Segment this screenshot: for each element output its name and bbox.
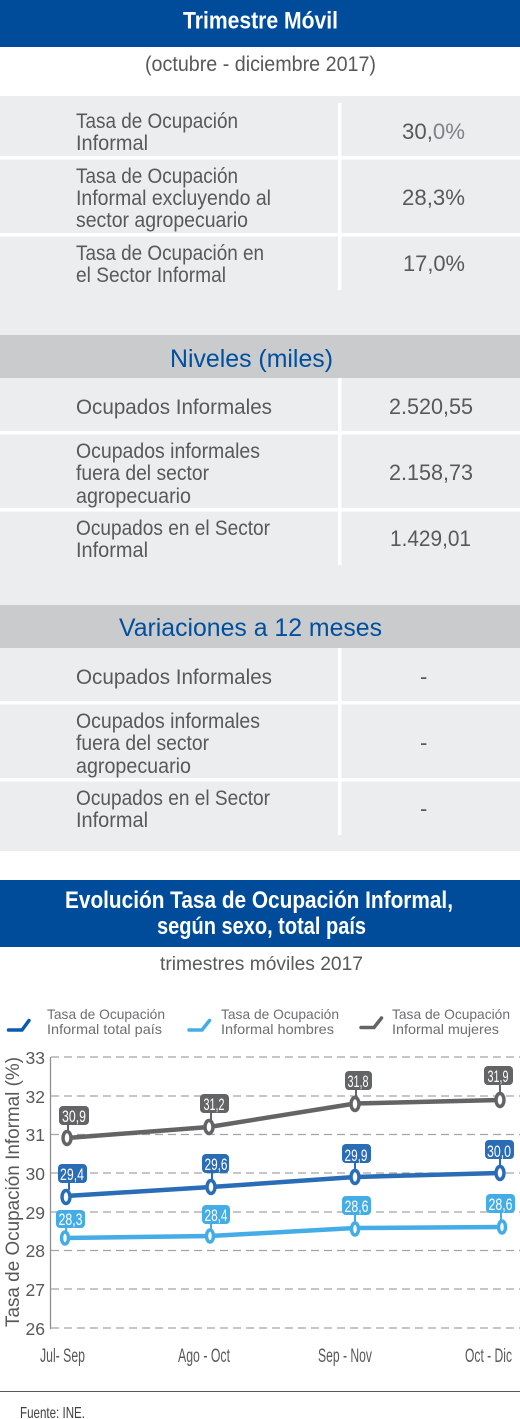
series: total país: 29,6: [204, 1155, 228, 1174]
row: excluyendo sector agropecuario: Tasa de Ocupación: [76, 164, 238, 188]
legend: total país: Tasa de Ocupación: [47, 1006, 165, 1022]
series: hombres: [56, 1194, 515, 1244]
series: mujeres: [59, 1066, 513, 1144]
panel: niveles: [0, 378, 520, 605]
row: fuera del sector agropecuario: 2.158,73: [389, 460, 473, 485]
subtitle: trimestres móviles: trimestres móviles 2017: [160, 954, 363, 975]
legend: mujeres: Tasa de Ocupación: [392, 1006, 510, 1022]
row: sector informal: Tasa de Ocupación en: [76, 241, 264, 265]
y axis labels: 29: [26, 1203, 45, 1223]
x axis labels: Sep - Nov: [318, 1346, 372, 1367]
subtitle: period: (octubre - diciembre 2017): [145, 52, 376, 76]
row: ocupados informales: Ocupados Informales: [76, 665, 272, 689]
row: ocupados en el sector informal: 1.429,01: [390, 526, 471, 551]
row: tasa de ocupación informal: [76, 109, 465, 155]
legend: mujeres: Informal mujeres: [392, 1021, 499, 1037]
y axis labels: 31: [26, 1125, 45, 1145]
row: ocupados informales: [76, 664, 427, 689]
row: sector informal: el Sector Informal: [76, 263, 226, 287]
row: fuera del sector agropecuario: agropecuario: [76, 754, 191, 778]
y axis labels: 32: [26, 1087, 45, 1107]
y axis labels: [26, 1048, 45, 1339]
legend: total país: [8, 1006, 165, 1037]
row: ocupados en el sector informal: Informal: [76, 808, 148, 832]
legend: [8, 1006, 510, 1037]
x axis labels: Ago - Oct: [178, 1346, 230, 1367]
series: hombres: 28,4: [204, 1206, 228, 1225]
panel: trimestre móvil rates: [0, 96, 520, 335]
panel: variaciones: [0, 648, 520, 851]
heading: Niveles (miles): Niveles (miles): [170, 345, 333, 373]
series: mujeres: 31,8: [348, 1072, 368, 1091]
y axis labels: 28: [26, 1241, 45, 1261]
row: fuera del sector agropecuario: Ocupados informales: [76, 439, 260, 463]
row: fuera del sector agropecuario: Ocupados informales: [76, 709, 260, 733]
row: excluyendo sector agropecuario: sector agropecuario: [76, 208, 248, 232]
row: tasa de ocupación informal: Tasa de Ocupación: [76, 109, 238, 133]
heading: Variaciones a 12 meses: Variaciones a 12 meses: [119, 614, 382, 642]
series: hombres: 28,6: [344, 1197, 368, 1216]
row: ocupados en el sector informal: [76, 786, 427, 832]
header: Evolución Tasa de Ocupación Informal: según sexo, total país: [157, 913, 366, 940]
series: total país: 29,4: [60, 1165, 84, 1184]
series: mujeres: 30,9: [62, 1107, 86, 1126]
row: fuera del sector agropecuario: [76, 709, 427, 778]
header: Evolución Tasa de Ocupación Informal: [0, 880, 520, 947]
heading: Variaciones a 12 meses: [0, 605, 520, 648]
row: ocupados informales: [76, 394, 473, 419]
row: ocupados en el sector informal: Ocupados en el Sector: [76, 786, 270, 810]
row: sector informal: 17,0%: [403, 251, 465, 276]
row: fuera del sector agropecuario: [76, 439, 473, 508]
series: mujeres: 31,2: [204, 1095, 224, 1114]
row: tasa de ocupación informal: 30,0%: [402, 119, 465, 144]
y axis labels: 26: [26, 1319, 45, 1339]
row: ocupados informales: Ocupados Informales: [76, 395, 272, 419]
series: total país: [58, 1140, 514, 1204]
row: fuera del sector agropecuario: fuera del sector: [76, 461, 209, 485]
x axis labels: Jul- Sep: [40, 1346, 85, 1367]
x axis labels: [40, 1346, 512, 1367]
row: fuera del sector agropecuario: agropecuario: [76, 484, 191, 508]
row: excluyendo sector agropecuario: 28,3%: [402, 185, 465, 210]
row: sector informal: [76, 241, 465, 287]
row: ocupados en el sector informal: -: [420, 796, 427, 821]
y axis labels: 27: [26, 1280, 45, 1300]
series: total país: 29,9: [344, 1146, 368, 1165]
legend: hombres: [189, 1006, 339, 1037]
row: fuera del sector agropecuario: fuera del sector: [76, 731, 209, 755]
row: excluyendo sector agropecuario: Informal excluyendo al: [76, 186, 271, 210]
row: ocupados en el sector informal: Ocupados en el Sector: [76, 516, 270, 540]
line chart: [3, 1048, 520, 1367]
row: ocupados informales: 2.520,55: [389, 394, 473, 419]
series: hombres: 28,3: [58, 1210, 82, 1229]
row: tasa de ocupación informal: Informal: [76, 131, 148, 155]
heading: Niveles (miles): [0, 335, 520, 378]
series: mujeres: 31,9: [488, 1067, 508, 1086]
row: ocupados en el sector informal: Informal: [76, 538, 148, 562]
legend: mujeres: [361, 1006, 510, 1037]
row: ocupados informales: -: [420, 664, 427, 689]
header: Trimestre Móvil: [0, 0, 520, 47]
row: excluyendo sector agropecuario: [76, 164, 465, 232]
legend: hombres: Tasa de Ocupación: [221, 1006, 339, 1022]
legend: hombres: Informal hombres: [221, 1021, 334, 1037]
y axis title: Tasa de Ocupación Informal (%): [3, 1057, 24, 1327]
header: Evolución Tasa de Ocupación Informal: Evolución Tasa de Ocupación Informal,: [65, 887, 453, 914]
row: ocupados en el sector informal: [76, 516, 471, 562]
series: total país: 30,0: [487, 1142, 511, 1161]
legend: total país: Informal total país: [47, 1021, 162, 1037]
row: fuera del sector agropecuario: -: [420, 730, 427, 755]
y axis labels: 33: [26, 1048, 45, 1068]
y axis labels: 30: [26, 1164, 45, 1184]
header: Trimestre Móvil: Trimestre Móvil: [183, 8, 338, 34]
